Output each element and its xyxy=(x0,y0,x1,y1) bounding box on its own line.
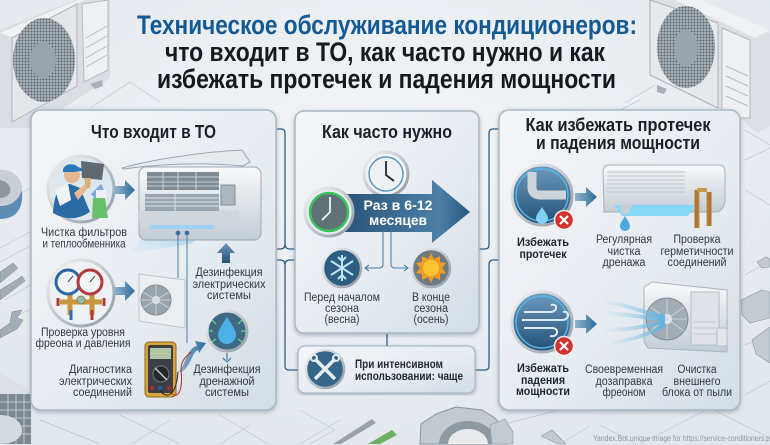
branches xyxy=(365,231,408,271)
arrow xyxy=(575,187,597,207)
text: drain cleaning xyxy=(596,234,652,269)
text: refrigerant: фреона и давления xyxy=(36,338,130,350)
icon: wrenches xyxy=(306,350,344,388)
text: clean outdoor unit: Очистка xyxy=(678,364,717,376)
text: filters: и теплообменника xyxy=(42,238,126,250)
text: avoid leaks: протечек xyxy=(520,249,567,261)
text: drain disinfection: дренажной xyxy=(200,376,254,388)
text: filters xyxy=(41,227,127,250)
arrow xyxy=(114,281,135,301)
text: before season: сезона xyxy=(325,303,360,315)
text: drain cleaning: чистка xyxy=(608,246,641,258)
text: drain disinfection: системы xyxy=(205,387,249,399)
title: Техническое обслуживание кондиционеров: xyxy=(137,10,637,40)
text: avoid power loss: падения xyxy=(521,375,565,387)
icon: clock xyxy=(364,152,408,196)
arrow text xyxy=(364,197,433,228)
panel: avoid leaks and power loss xyxy=(499,110,740,410)
text: before season xyxy=(304,292,380,326)
text: recharge: фреоном xyxy=(602,387,646,399)
text: end of season: В конце xyxy=(412,292,450,304)
text: before season: (весна) xyxy=(324,314,360,326)
heading: avoid leaks: Как избежать протечек xyxy=(526,115,711,135)
text: clean outdoor unit xyxy=(662,364,732,399)
text: filters: Чистка фильтров xyxy=(41,227,127,239)
title: избежать протечек и падения мощности xyxy=(157,64,616,94)
up arrow xyxy=(217,243,235,263)
icon: sun xyxy=(412,249,450,287)
curved arrow xyxy=(178,341,206,372)
text: clean outdoor unit: блока от пыли xyxy=(662,387,732,399)
badge: x xyxy=(554,336,574,356)
multimeter xyxy=(145,342,191,397)
icon: snowflake xyxy=(323,249,361,287)
text: drain disinfection: Дезинфекция xyxy=(194,364,260,376)
small down arrow xyxy=(223,353,231,362)
indoor AC xyxy=(603,165,725,231)
badge: x xyxy=(554,210,574,230)
text: end of season: сезона xyxy=(414,303,449,315)
text: before season: Перед началом xyxy=(304,292,380,304)
text: end of season: (осень) xyxy=(414,314,449,326)
background: pens xyxy=(333,419,397,444)
text: intensive use: использовании: чаще xyxy=(355,371,463,383)
text: electrical disinfection: системы xyxy=(207,290,251,302)
text: end of season xyxy=(412,292,450,326)
airflow xyxy=(128,230,214,254)
background: right side parts xyxy=(490,257,770,444)
background: left outdoor unit xyxy=(0,0,110,128)
text: diagnostics: соединений xyxy=(73,387,132,399)
background: right outdoor unit xyxy=(649,0,770,133)
text: drain cleaning: Регулярная xyxy=(596,234,652,246)
text: avoid power loss: мощности xyxy=(516,386,570,398)
text: tightness xyxy=(660,234,734,269)
arrow xyxy=(575,314,597,334)
connector brackets xyxy=(277,129,499,370)
connector lines xyxy=(176,231,189,343)
text: avoid leaks xyxy=(517,237,569,261)
text: intensive use: При интенсивном xyxy=(355,359,443,371)
big arrow xyxy=(345,180,470,243)
background: tools on the left xyxy=(0,263,25,338)
title xyxy=(137,10,637,94)
panel: intensive use xyxy=(298,346,475,393)
text: avoid power loss xyxy=(516,363,570,398)
text: diagnostics xyxy=(59,364,133,399)
text: avoid leaks: Избежать xyxy=(517,237,569,249)
outdoor unit clean xyxy=(644,282,727,352)
text: recharge xyxy=(585,364,663,399)
text: clean outdoor unit: внешнего xyxy=(674,376,720,388)
arrow text: месяцев xyxy=(369,212,427,228)
text: avoid power loss: Избежать xyxy=(517,363,569,375)
text: tightness: герметичности xyxy=(660,246,734,258)
icon: technician xyxy=(48,156,114,222)
indoor AC open xyxy=(122,150,261,240)
text: intensive use xyxy=(355,359,463,383)
text: diagnostics: Диагностика xyxy=(69,364,133,376)
background: filter ring xyxy=(0,170,22,219)
text: refrigerant xyxy=(36,327,130,350)
arrow text: Раз в 6-12 xyxy=(364,197,433,213)
panel: what is included xyxy=(31,110,276,410)
text: electrical disinfection: Дезинфекция xyxy=(196,267,262,279)
icon: pipe leak xyxy=(512,165,574,230)
icon: gauges xyxy=(48,260,114,326)
arrow xyxy=(114,180,135,200)
heading: avoid leaks: и падения мощности xyxy=(536,133,700,153)
text: electrical disinfection: электрических xyxy=(192,279,266,291)
background: fan unit bottom left xyxy=(0,373,31,444)
text: recharge: Своевременная xyxy=(585,364,663,376)
text: refrigerant: Проверка уровня xyxy=(41,327,125,339)
background: gear xyxy=(420,407,508,444)
icon: wind xyxy=(512,292,574,356)
heading: avoid leaks xyxy=(526,115,711,153)
airflow xyxy=(605,302,665,343)
icon: green clock xyxy=(305,188,353,236)
icon: water drop xyxy=(207,311,247,351)
panel: how often xyxy=(295,111,479,333)
text: electrical disinfection xyxy=(192,267,266,302)
title: что входит в ТО, как часто нужно и как xyxy=(165,37,605,67)
text: recharge: дозаправка xyxy=(596,376,653,388)
outdoor unit xyxy=(139,274,185,328)
text: diagnostics: электрических xyxy=(59,376,132,388)
heading: how often: Как часто нужно xyxy=(322,122,452,142)
text: tightness: соединений xyxy=(668,257,726,269)
text: drain disinfection xyxy=(194,364,260,399)
heading: what is included: Что входит в ТО xyxy=(91,122,216,142)
text: tightness: Проверка xyxy=(674,234,721,246)
text: drain cleaning: дренажа xyxy=(602,257,646,269)
